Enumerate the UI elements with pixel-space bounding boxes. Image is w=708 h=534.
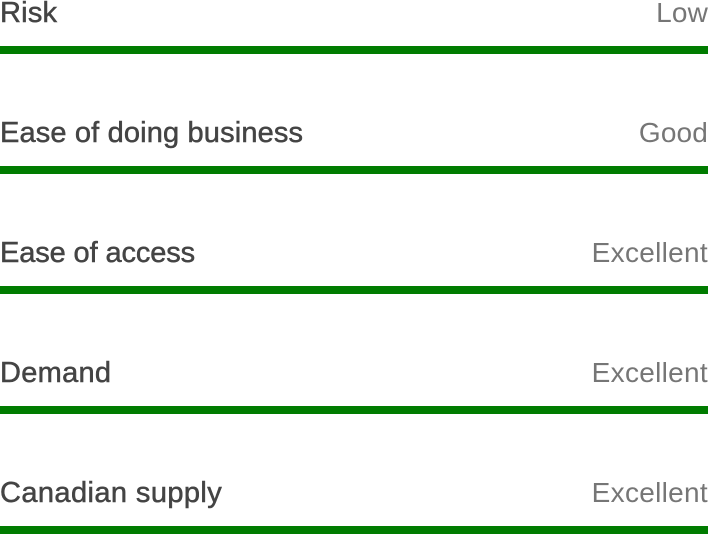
value: Excellent: Excellent (592, 237, 708, 268)
green bar: Canadian supply (0, 526, 708, 534)
rating row: Ease of access (0, 237, 708, 294)
green bar: Ease of doing business (0, 166, 708, 174)
label: Ease of access: Ease of access (0, 237, 195, 269)
rating row: Ease of doing business (0, 117, 708, 174)
rating row: Canadian supply (0, 477, 708, 534)
label: Ease of doing business: Ease of doing business (0, 117, 303, 149)
green bar: Ease of access (0, 286, 708, 294)
green bar: Demand (0, 406, 708, 414)
rating row: Risk (0, 0, 708, 54)
label: Canadian supply: Canadian supply (0, 477, 222, 509)
green bar: Risk (0, 46, 708, 54)
label: Demand: Demand (0, 357, 111, 389)
value: Excellent: Excellent (592, 357, 708, 388)
value: Good: Good (639, 117, 708, 148)
rating row: Demand (0, 357, 708, 414)
value: Excellent: Excellent (592, 477, 708, 508)
